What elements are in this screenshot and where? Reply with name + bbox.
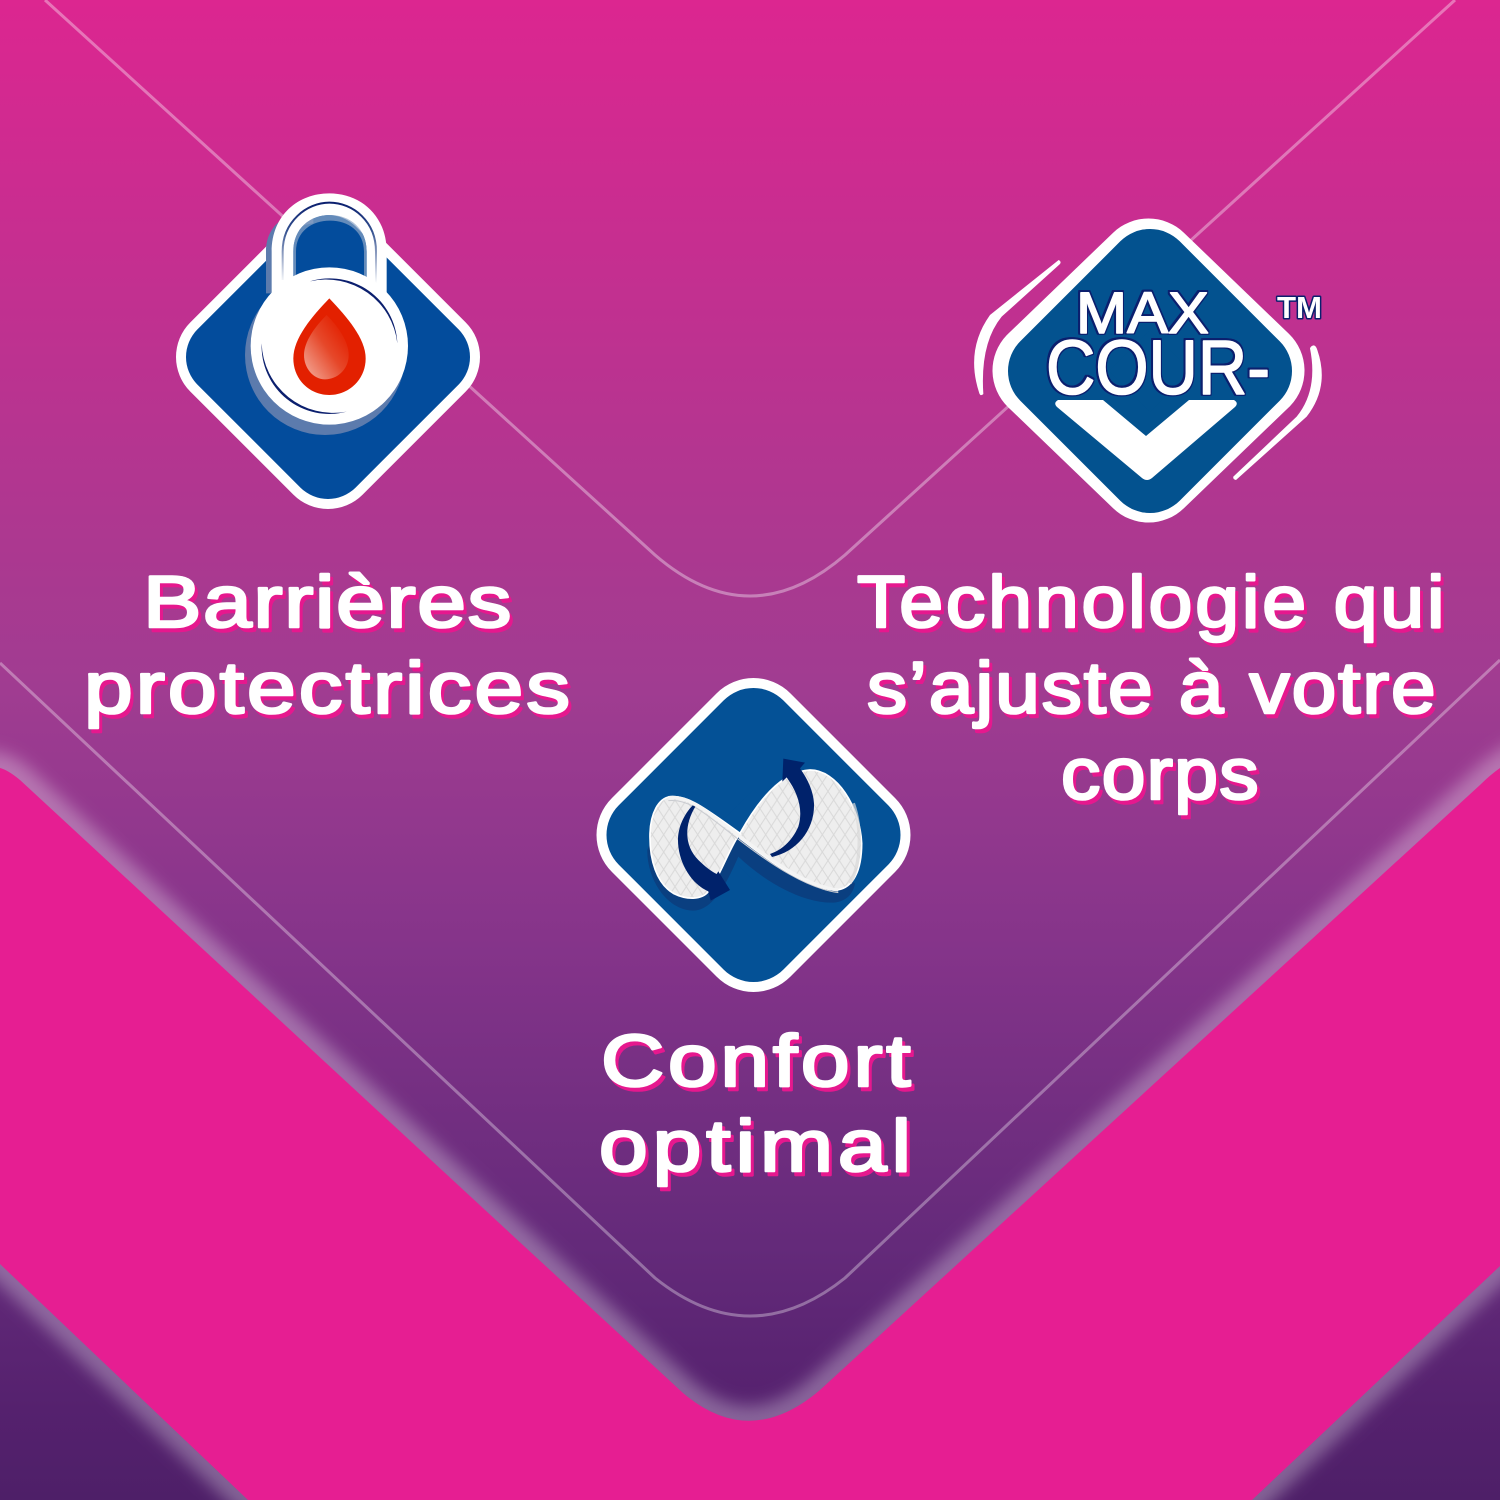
label: Barrières protectrices bbox=[84, 562, 570, 729]
logo text: COUR-: COUR- bbox=[1046, 325, 1270, 411]
label: Technologie qui s'ajuste à votre corps: corps bbox=[1061, 734, 1259, 815]
label: Technologie qui s'ajuste à votre corps bbox=[857, 562, 1445, 815]
pink foreground shape bbox=[0, 768, 1500, 1500]
label: Barrières protectrices: protectrices bbox=[84, 648, 570, 729]
diamond badge bbox=[1044, 270, 1254, 472]
lower chevron line bbox=[0, 660, 1500, 1316]
icon: Max Cour-V badge bbox=[974, 260, 1322, 480]
logo text: MAX: MAX bbox=[1076, 281, 1209, 346]
icon: infinity pad bbox=[647, 730, 862, 940]
upper chevron line bbox=[45, 0, 1455, 596]
pad shape bbox=[647, 759, 862, 911]
arrow: upward bbox=[770, 759, 814, 857]
label: Technologie qui s'ajuste à votre corps: s’ajuste à votre bbox=[867, 648, 1436, 729]
label: Barrières protectrices: Barrières bbox=[143, 562, 511, 643]
diamond badge bbox=[648, 730, 858, 940]
label: Confort optimal bbox=[599, 1021, 911, 1187]
diamond badge bbox=[225, 254, 431, 460]
logo text: TM: TM bbox=[1277, 290, 1322, 325]
label: Technologie qui s'ajuste à votre corps: Technologie qui bbox=[857, 562, 1445, 643]
padlock bbox=[245, 193, 408, 435]
flex curves bbox=[974, 260, 1322, 480]
logo chevron bbox=[1055, 400, 1237, 480]
pink shape edge glow bbox=[0, 768, 1500, 1500]
icon: padlock with blood drop bbox=[225, 193, 431, 460]
label: Confort optimal: optimal bbox=[599, 1106, 911, 1187]
arrow: downward bbox=[678, 805, 730, 901]
label: Confort optimal: Confort bbox=[601, 1021, 911, 1102]
